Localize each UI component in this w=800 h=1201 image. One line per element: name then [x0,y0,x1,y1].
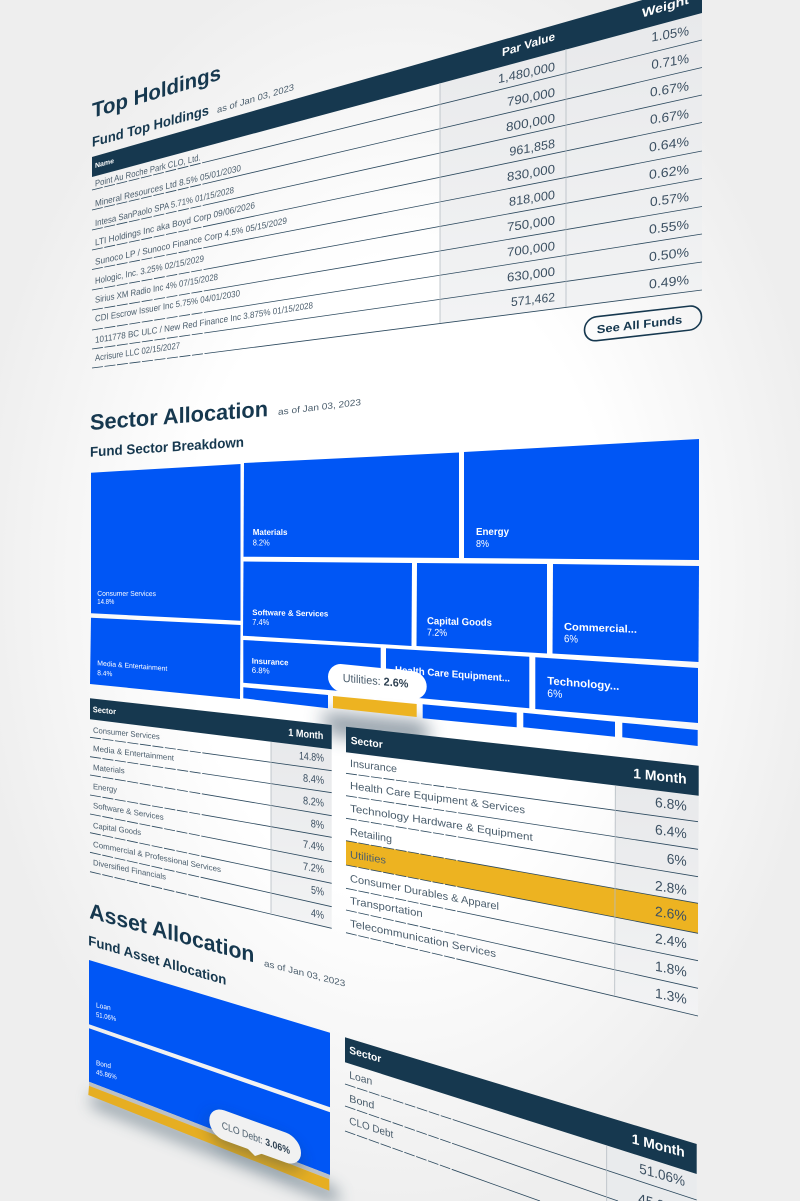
asset names: Bond [349,1093,374,1112]
holdings names: Intesa SanPaolo SPA 5.71% 01/15/2028 [95,185,234,228]
holdings table header: Par Value [502,30,555,59]
treemap [90,439,699,746]
tile: Commercial: Commercial... [564,621,637,636]
tile: Technology: 6% [547,688,562,701]
left table values: 8.4% [303,773,324,787]
right table values: 2.4% [655,930,687,951]
small tile: Consumer Durables [423,704,517,727]
tile: Health Care Equipment [386,648,529,708]
right table values: 2.6% [655,903,687,924]
left table values: 14.8% [299,750,324,765]
subtitle: Fund Top Holdings: Fund Top Holdings [92,103,209,151]
weights: 0.67% [650,78,689,100]
section: asset allocation [88,898,697,1201]
date: as of Jan 03, 2023: as of Jan 03, 2023 [264,958,345,989]
left table values: 7.4% [303,839,324,854]
left table sector names: Software & Services [93,801,164,822]
left table sector names: Capital Goods [93,821,141,837]
par values: 750,000 [507,213,555,234]
par values: 700,000 [507,239,555,260]
asset table header [345,1037,697,1174]
highlighted row: Utilities [346,841,698,933]
tile: Capital Goods [416,563,547,654]
tile: Consumer Services: 14.8% [97,599,114,606]
tile: Consumer Services: Consumer Services [97,591,156,598]
tile: Insurance [243,640,381,694]
holdings names [95,152,313,363]
tile: Loan [89,960,330,1107]
weights: 0.67% [650,106,689,127]
right table sector names [350,758,533,960]
right table values: 6.4% [655,821,687,841]
weights: 0.71% [651,51,689,72]
weights: 0.64% [649,134,689,155]
par values: 830,000 [507,162,555,184]
par values: 630,000 [507,265,555,285]
right table header [346,727,699,796]
tooltip: Utilities 2.6% [328,663,427,701]
left table values: 5% [311,884,324,899]
weights: 0.50% [649,244,689,264]
highlight shadow under utilities [320,712,430,745]
par values: 961,858 [509,137,555,159]
left table header: Sector [93,705,116,716]
tile: Media & Entertainment: 8.4% [97,670,112,678]
right table values: 1.3% [655,985,687,1007]
weights: 0.49% [649,272,689,292]
par values: 1,480,000 [498,60,555,86]
holdings table header: Name [95,157,114,170]
small tile: Transportation [523,713,615,737]
right table sector names: Transportation [350,895,423,920]
tile: Bond: Bond [96,1059,111,1070]
small tile: Retailing [243,687,328,708]
tile: Technology [535,657,698,723]
asset treemap [88,960,330,1191]
subtitle: Fund Sector Breakdown: Fund Sector Breakdown [90,434,244,460]
tooltip: Utilities 2.6%: Utilities: 2.6% [343,673,408,691]
tile: Software & Services: Software & Services [252,608,329,619]
value column shading [271,742,332,928]
tile: Energy [464,439,699,560]
asset values: 51.06% [639,1161,685,1190]
left table sector names [93,726,221,882]
par values: 818,000 [509,188,555,209]
left table values: 8.2% [303,795,324,810]
section: top holdings [92,0,702,368]
tooltip: CLO Debt 3.06% [209,1105,301,1175]
right table sector names: Consumer Durables & Apparel [350,873,499,913]
tile: Energy: Energy [476,527,509,538]
value column shading [607,1146,697,1201]
date: as of Jan 03, 2023: as of Jan 03, 2023 [278,397,361,417]
left table header [90,698,332,749]
tile: Materials [244,452,459,558]
left table values [299,750,324,922]
right table values [655,794,687,1007]
tile: Energy: 8% [476,539,489,550]
tile: Media & Entertainment [90,618,240,699]
small tile: Telecommunication [622,723,698,746]
right table values: 6.8% [655,794,687,814]
holdings names: Acrisure LLC 02/15/2027 [95,340,180,363]
left table header: 1 Month [288,727,323,742]
asset table header: 1 Month [632,1131,685,1161]
holdings row lines [92,40,702,368]
tile: Software & Services [243,562,412,646]
tile: Commercial: 6% [564,633,578,646]
tile: Capital Goods: 7.2% [427,628,447,639]
weights: 0.62% [649,161,689,182]
holdings names: Sirius XM Radio Inc 4% 07/15/2028 [95,272,218,305]
title: Asset Allocation: Asset Allocation [89,898,254,967]
value column shading [615,786,699,1016]
left table sector names: Materials [93,763,125,775]
right table values: 1.8% [655,958,687,980]
right table sector names: Technology Hardware & Equipment [350,803,533,844]
asset names [349,1069,393,1141]
right table sector names: Insurance [350,758,397,775]
weights: 1.05% [651,23,689,45]
section: sector allocation [90,396,699,1016]
right table sector names: Health Care Equipment & Services [350,780,525,816]
left table values: 8% [311,818,324,832]
button: See All Funds: See All Funds [597,315,682,336]
right table header: Sector [351,735,383,751]
tile: Media & Entertainment: Media & Entertainment [97,660,167,673]
value column shading [440,13,702,324]
right table row lines [346,773,698,1016]
right table sector names: Utilities [350,849,386,867]
tile: Health Care Equipment: Health Care Equipment... [395,665,510,685]
holdings table header [92,0,702,177]
tile: Consumer Services [91,464,240,621]
asset names: Loan [349,1069,372,1088]
table: sector list, right [346,727,699,1016]
right table header: 1 Month [633,765,687,787]
left table row lines [90,737,332,928]
tooltip: CLO Debt 3.06%: CLO Debt: 3.06% [222,1121,290,1157]
par values: 800,000 [506,111,555,135]
table: asset list [345,1037,697,1201]
right table values: 2.8% [655,877,687,898]
asset table row lines [345,1084,697,1201]
tile: Bond: 45.86% [96,1068,117,1082]
tile: Loan: 51.06% [96,1011,117,1023]
button: See All Funds [584,305,702,342]
tile: Capital Goods: Capital Goods [427,616,492,629]
tile: CLO Debt highlighted [88,1086,329,1191]
right table sector names: Telecommunication Services [350,918,496,960]
tile: Utilities highlighted [333,696,417,717]
asset names: CLO Debt [349,1115,393,1141]
par values: 790,000 [507,85,555,109]
right table values: 6% [667,850,687,869]
treemap shadow [92,1092,340,1201]
left table sector names: Diversified Financials [93,858,166,882]
tile: Materials: Materials [253,528,288,537]
holdings names: LTI Holdings Inc aka Boyd Corp 09/06/2026 [95,200,255,248]
tile: Bond [89,1028,330,1175]
left table values: 4% [311,907,324,922]
tile: Commercial [552,564,699,662]
tile: Materials: 8.2% [253,539,270,548]
par values: 571,462 [511,290,555,309]
left table sector names: Media & Entertainment [93,744,175,763]
par values [498,60,555,309]
asset table header: Sector [349,1044,381,1066]
right table sector names: Retailing [350,826,392,846]
left table sector names: Energy [93,782,117,794]
holdings names: Sunoco LP / Sunoco Finance Corp 4.5% 05/15/2029 [95,215,287,267]
weights: 0.57% [650,189,689,209]
tile: Technology: Technology... [547,675,619,693]
left table sector names: Consumer Services [93,726,160,741]
subtitle: Fund Asset Allocation: Fund Asset Allocation [88,933,226,989]
left table sector names: Commercial & Professional Services [93,840,221,874]
holdings names: 1011778 BC ULC / New Red Finance Inc 3.875% 01/15/2028 [95,300,313,345]
title: Sector Allocation: Sector Allocation [90,396,268,435]
table: sector list, left [90,698,332,928]
tile: Loan: Loan [96,1002,111,1012]
gap shading above CLO Debt [89,1082,330,1179]
weights: 0.55% [649,217,689,237]
left table values: 7.2% [303,861,324,876]
tile: Insurance: Insurance [252,657,289,667]
tile: Insurance: 6.8% [252,666,270,676]
weights [649,23,689,292]
title: Top Holdings: Top Holdings [92,61,221,123]
holdings names: Hologic, Inc. 3.25% 02/15/2029 [95,253,204,286]
holdings names: CDI Escrow Issuer Inc 5.75% 04/01/2030 [95,288,240,324]
tile: Software & Services: 7.4% [252,618,269,627]
holdings names: Mineral Resources Ltd 8.5% 05/01/2030 [95,163,241,209]
date: as of Jan 03, 2023: as of Jan 03, 2023 [217,82,294,115]
holdings names: Point Au Roche Park CLO, Ltd. [95,152,201,189]
